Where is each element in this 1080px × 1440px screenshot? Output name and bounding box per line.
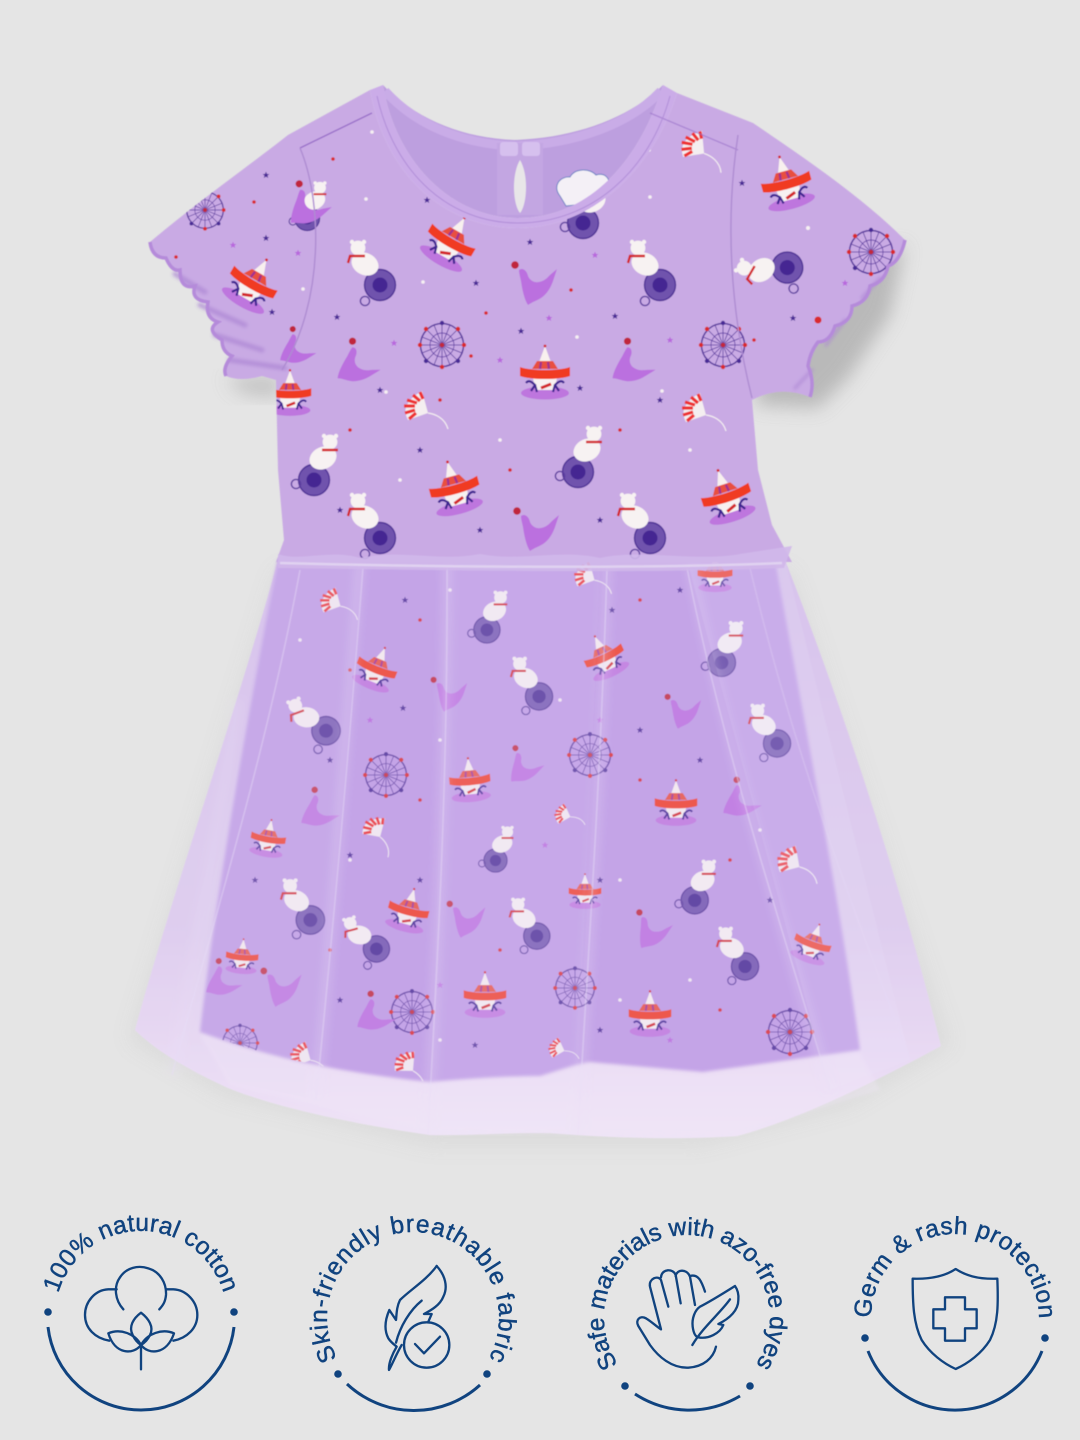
badge dots — [334, 1370, 491, 1378]
badge arc — [48, 1327, 234, 1410]
badge text: Safe materials with azo-free dyes — [587, 1217, 788, 1370]
badge text: Germ & rash protection — [854, 1216, 1052, 1318]
keyhole opening and placket — [497, 142, 543, 215]
neck care label — [557, 170, 609, 206]
bodice and sleeves — [150, 90, 905, 562]
skirt print motifs — [196, 554, 837, 1089]
badge dots — [621, 1382, 754, 1390]
tulle overlay with folds — [135, 560, 941, 1138]
icon: cotton boll — [85, 1267, 197, 1369]
badge arc — [347, 1384, 480, 1411]
bodice print motifs — [174, 128, 895, 559]
dress cast shadow — [130, 245, 950, 1145]
badge: 100% natural cotton — [44, 1215, 238, 1412]
badge: germ and rash protection — [854, 1216, 1052, 1412]
badge: safe materials with azo-free dyes — [587, 1217, 788, 1412]
badge dots — [861, 1334, 1049, 1342]
cotton skirt — [200, 560, 860, 1082]
sleeve fold shading — [175, 274, 880, 388]
back neck rib — [385, 91, 661, 146]
neckline rib band — [370, 85, 677, 228]
icon: hand and leaf — [637, 1270, 738, 1368]
bodice seams — [150, 96, 905, 398]
back neck interior — [383, 85, 663, 218]
badge: skin-friendly breathable fabric — [310, 1216, 518, 1412]
waist gather and ruffle — [278, 546, 792, 571]
tulle hem edge — [200, 1034, 880, 1134]
badge dots — [44, 1308, 238, 1316]
badge arc — [635, 1394, 740, 1410]
icon: shield with cross — [913, 1269, 998, 1369]
icon: feather with check — [386, 1266, 449, 1370]
badge text: 100% natural cotton — [44, 1215, 235, 1292]
product photo: dress — [130, 85, 950, 1145]
tulle outer layer — [135, 560, 941, 1138]
badge arc — [868, 1351, 1042, 1410]
badge text: Skin-friendly breathable fabric — [310, 1216, 518, 1362]
